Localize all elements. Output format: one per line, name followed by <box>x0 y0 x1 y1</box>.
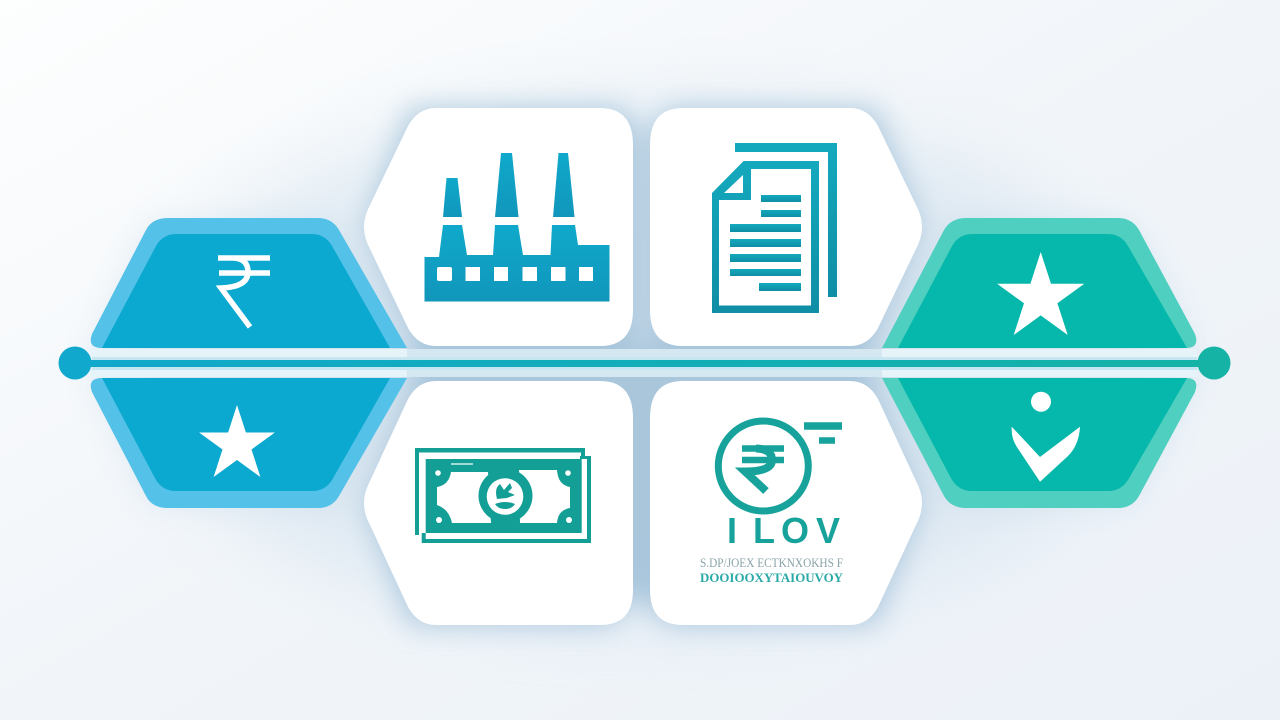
icon: factory <box>424 153 610 302</box>
icon: rupee coin <box>718 421 842 511</box>
panel: top-left tile with factory <box>364 108 633 346</box>
right dot <box>1198 346 1230 380</box>
panel: bottom-right tile with rupee badge <box>650 381 922 625</box>
label: I LOV: I LOV <box>727 510 840 551</box>
panel: bottom-left tile with banknote <box>364 381 633 625</box>
icon: white star <box>199 405 275 477</box>
caption line 2: DOOIOOXYTAIOUVOY <box>700 570 844 585</box>
icon: document stack <box>712 143 837 313</box>
icon: banknote <box>415 448 591 543</box>
icon: dot and check <box>1012 392 1080 482</box>
panel: teal hexagon upper <box>882 218 1196 348</box>
left dot <box>58 346 92 380</box>
panel: blue hexagon upper <box>91 218 407 348</box>
timeline axis <box>58 346 1230 380</box>
panel: teal hexagon lower <box>882 378 1196 508</box>
soft shadow behind tiles <box>91 105 1197 625</box>
icon: rupee symbol <box>218 258 270 327</box>
panel: blue hexagon lower <box>91 378 407 508</box>
panel: top-right tile with document <box>650 108 922 346</box>
icon: white star <box>997 252 1084 335</box>
caption line 1: S.DP/JOEX ECTKNXOKHS F <box>700 555 843 570</box>
